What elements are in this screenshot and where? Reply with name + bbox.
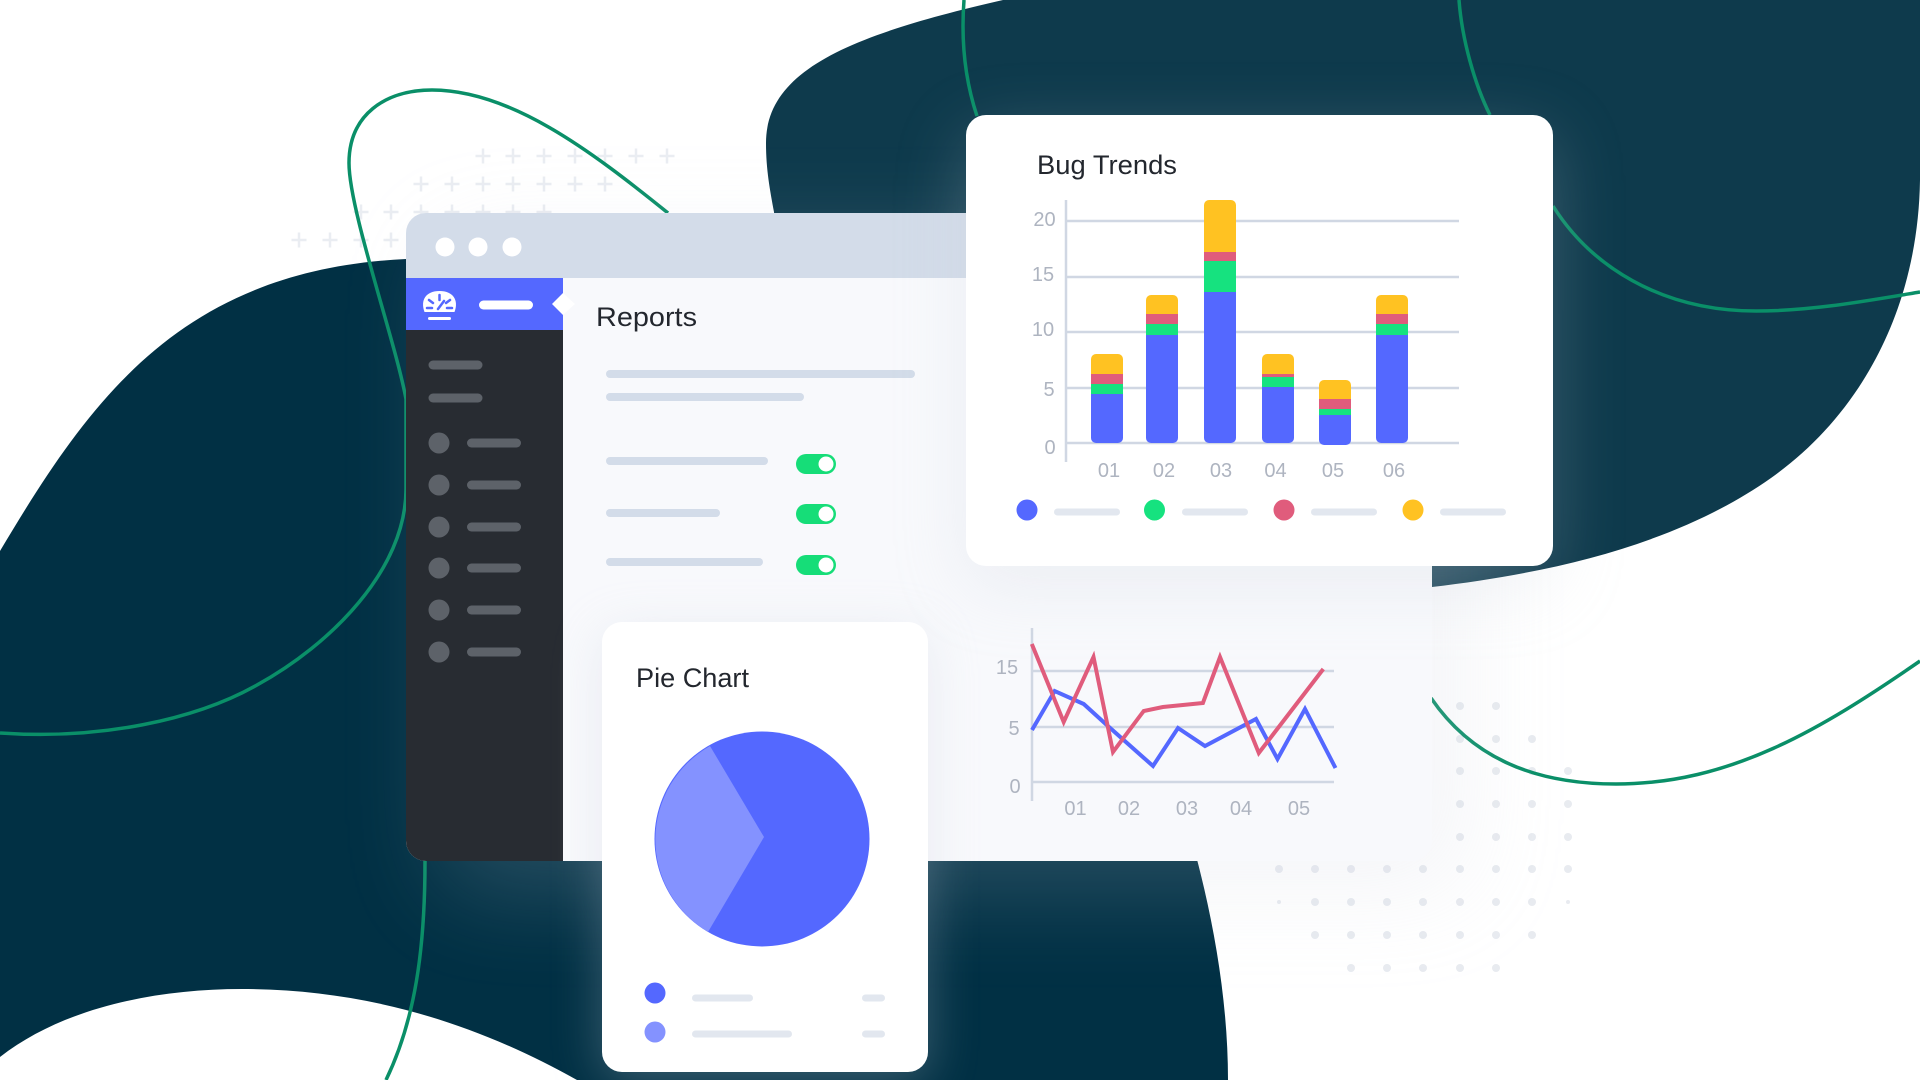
bar 04 (1262, 354, 1294, 443)
stacked bar chart: 02 (1153, 460, 1175, 482)
bar 01 (1091, 354, 1123, 443)
stacked bar chart: 06 (1383, 460, 1405, 482)
plus sign pattern (292, 148, 674, 248)
line chart: 03 (1176, 798, 1198, 820)
sidebar menu items (428, 432, 521, 662)
stacked bar chart (1032, 200, 1459, 482)
line chart (996, 628, 1336, 820)
bar 06 (1376, 295, 1408, 443)
pie chart (654, 732, 870, 946)
heading: Pie Chart: Pie Chart (636, 663, 749, 693)
placeholder description lines (606, 370, 915, 401)
stacked bar chart: 5 (1043, 379, 1055, 401)
bar 03 (1204, 200, 1236, 443)
stacked bar chart: 20 (1033, 209, 1056, 231)
heading: Reports: Reports (596, 302, 697, 332)
stacked bar chart: 10 (1032, 319, 1054, 341)
window title bar (406, 213, 1432, 278)
line chart: 05 (1288, 798, 1310, 820)
green contour line: top segments (963, 0, 1490, 116)
line chart: 0 (1009, 776, 1021, 798)
panel: reports application window (406, 213, 1432, 861)
bar 05 (1319, 380, 1351, 445)
line chart: 04 (1230, 798, 1252, 820)
icon: speedometer gauge (423, 291, 456, 320)
green contour line: left loop (0, 90, 668, 734)
stacked bar chart: 03 (1210, 460, 1232, 482)
blob: lower left dark shape (0, 259, 1228, 1080)
panel: pie chart card (602, 622, 928, 1072)
blob: upper right dark shape (766, 0, 1920, 587)
heading: Bug Trends: Bug Trends (1037, 150, 1177, 180)
sidebar header (406, 278, 563, 330)
line chart: 5 (1008, 718, 1020, 740)
sidebar (406, 278, 575, 861)
bar chart legend (1016, 500, 1506, 520)
green contour line: right curve (1553, 206, 1920, 311)
line chart: 15 (996, 657, 1018, 679)
stacked bar chart: 04 (1264, 460, 1287, 482)
sidebar menu headings (428, 360, 482, 402)
active item pointer (552, 293, 575, 315)
settings rows with toggles (606, 454, 836, 575)
panel: bug trends card (966, 115, 1553, 566)
green contour line: lower stem (386, 861, 425, 1080)
stacked bar chart: 0 (1044, 437, 1056, 459)
line chart: 01 (1064, 798, 1087, 820)
stacked bar chart: 05 (1322, 460, 1344, 482)
bar 02 (1146, 295, 1178, 443)
green contour line: lower right curve (1431, 661, 1920, 784)
dot grid pattern (1275, 702, 1572, 972)
line chart: 02 (1118, 798, 1140, 820)
pie legend (644, 982, 885, 1042)
stacked bar chart: 01 (1098, 460, 1120, 482)
stacked bar chart: 15 (1032, 264, 1054, 286)
